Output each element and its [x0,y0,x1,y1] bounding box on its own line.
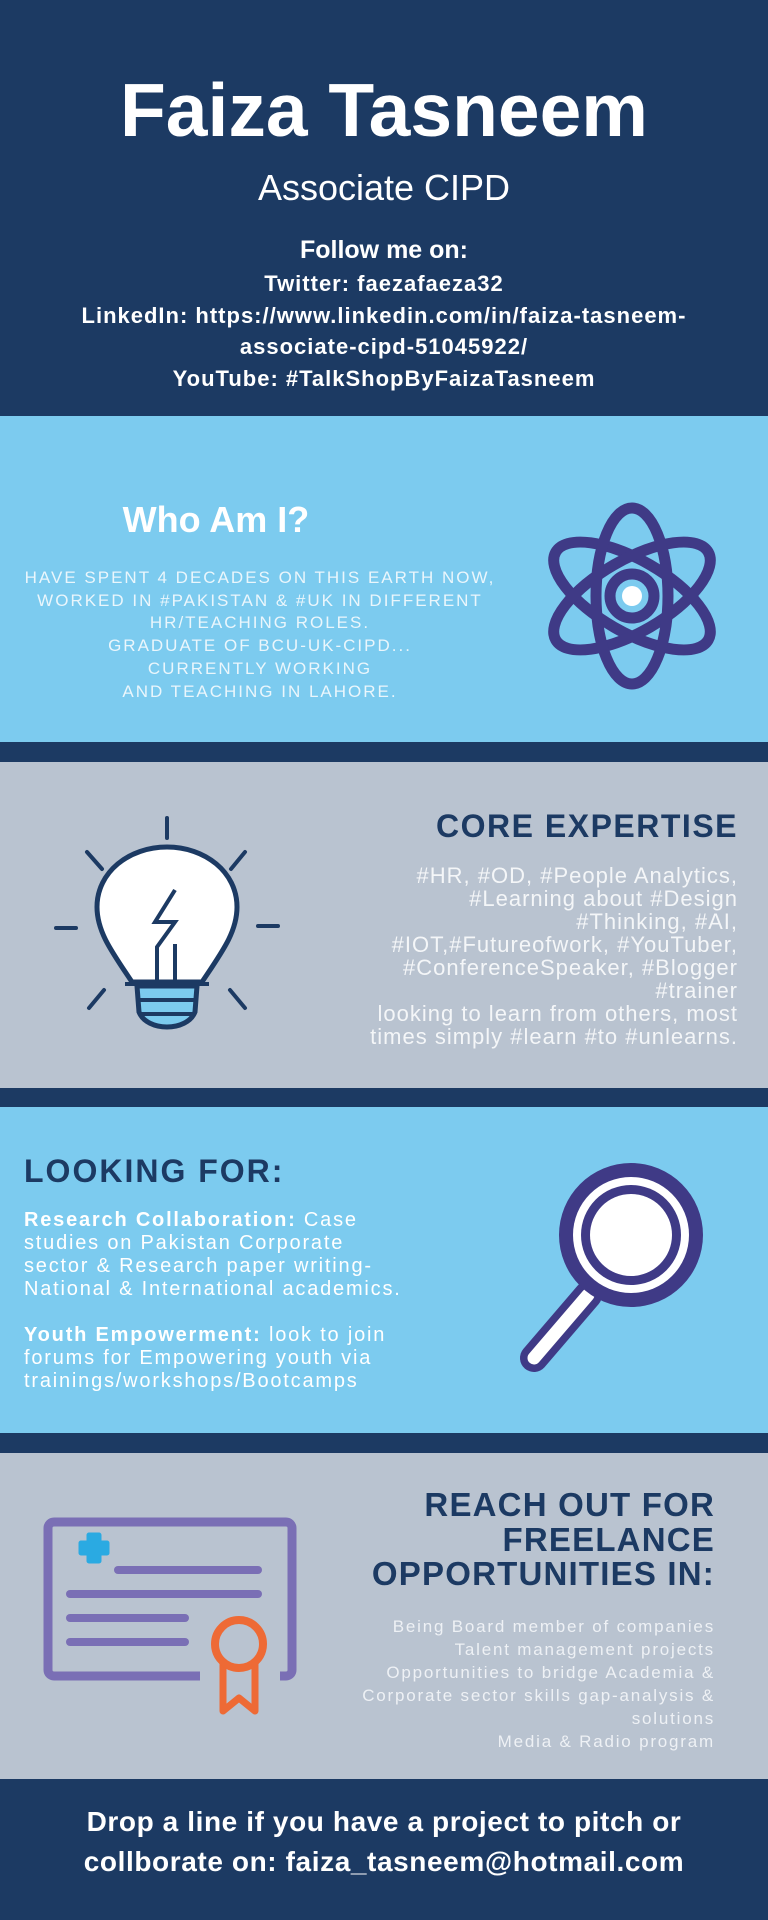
social links: Twitter: faezafaeza32 [264,271,504,296]
text: contact call to action: collborate on: faiza_tasneem@hotmail.com [84,1846,684,1877]
social links: YouTube: #TalkShopByFaizaTasneem [173,366,595,390]
follow heading: Follow me on: [300,236,468,264]
icon: magnifier [520,1163,703,1372]
panel: who am i [0,416,768,742]
text: opportunities list: solutions [632,1709,715,1728]
text: bio: HAVE SPENT 4 DECADES ON THIS EARTH NOW, [25,568,495,587]
subtitle: Associate CIPD [258,167,510,208]
text: opportunities list: Corporate sector skills gap-analysis & [362,1686,715,1705]
text: opportunities list [362,1617,715,1751]
heading: reach out: FREELANCE [503,1520,715,1558]
text: expertise list: #ConferenceSpeaker, #Blogger [403,955,738,980]
text: bio [25,568,495,701]
social links [82,271,686,390]
text: opportunities list: Opportunities to bridge Academia & [386,1663,715,1682]
text: contact call to action [84,1806,684,1877]
text: bio: AND TEACHING IN LAHORE. [122,682,398,701]
core expertise panel [0,762,768,1088]
text: opportunities list: Media & Radio program [498,1732,715,1751]
text: looking for details: sector & Research paper writing- [24,1255,373,1277]
text: looking for details: trainings/workshops/Bootcamps [24,1370,359,1392]
text: bio: GRADUATE OF BCU-UK-CIPD... [108,636,412,655]
heading: looking for: LOOKING FOR: [24,1153,284,1189]
icon: atom [548,502,716,690]
text: bio: HR/TEACHING ROLES. [150,613,370,632]
footer [0,1779,768,1920]
heading: core expertise: CORE EXPERTISE [436,808,738,844]
text: opportunities list: Being Board member of companies [393,1617,715,1636]
heading: reach out [372,1486,715,1592]
text: looking for details: Research Collaboration: Case [24,1209,358,1231]
text: bio: CURRENTLY WORKING [148,659,372,678]
text: looking for details: Youth Empowerment: look to join [24,1324,386,1346]
text: looking for details: studies on Pakistan Corporate [24,1232,344,1254]
text: expertise list: #IOT,#Futureofwork, #YouTuber, [392,932,738,957]
text: expertise list: #Learning about #Design [469,886,738,911]
text: looking for details [24,1209,402,1392]
text: expertise list: #Thinking, #AI, [576,909,738,934]
text: looking for details: National & International academics. [24,1278,402,1300]
text: opportunities list: Talent management projects [455,1640,715,1659]
text: expertise list: looking to learn from others, most [378,1001,738,1026]
text: looking for details: forums for Empowering youth via [24,1347,372,1369]
text: contact call to action: Drop a line if you have a project to pitch or [87,1806,681,1837]
icon: light bulb [54,816,280,1030]
heading: who am i: Who Am I? [123,499,309,540]
text: expertise list: #trainer [655,978,738,1003]
header panel [0,0,768,416]
icon: certificate [44,1518,296,1714]
heading: reach out: REACH OUT FOR [424,1486,715,1523]
title: Faiza Tasneem [120,68,648,152]
social links: associate-cipd-51045922/ [240,334,528,359]
text: bio: WORKED IN #PAKISTAN & #UK IN DIFFERENT [37,591,483,610]
panel: freelance [0,1453,768,1779]
social links: LinkedIn: https://www.linkedin.com/in/faiza-tasneem- [82,302,686,328]
text: expertise list: #HR, #OD, #People Analytics, [417,863,738,888]
panel: looking for [0,1107,768,1433]
heading: reach out: OPPORTUNITIES IN: [372,1555,715,1592]
text: expertise list: times simply #learn #to #unlearns. [370,1024,738,1049]
text: expertise list [370,863,738,1049]
